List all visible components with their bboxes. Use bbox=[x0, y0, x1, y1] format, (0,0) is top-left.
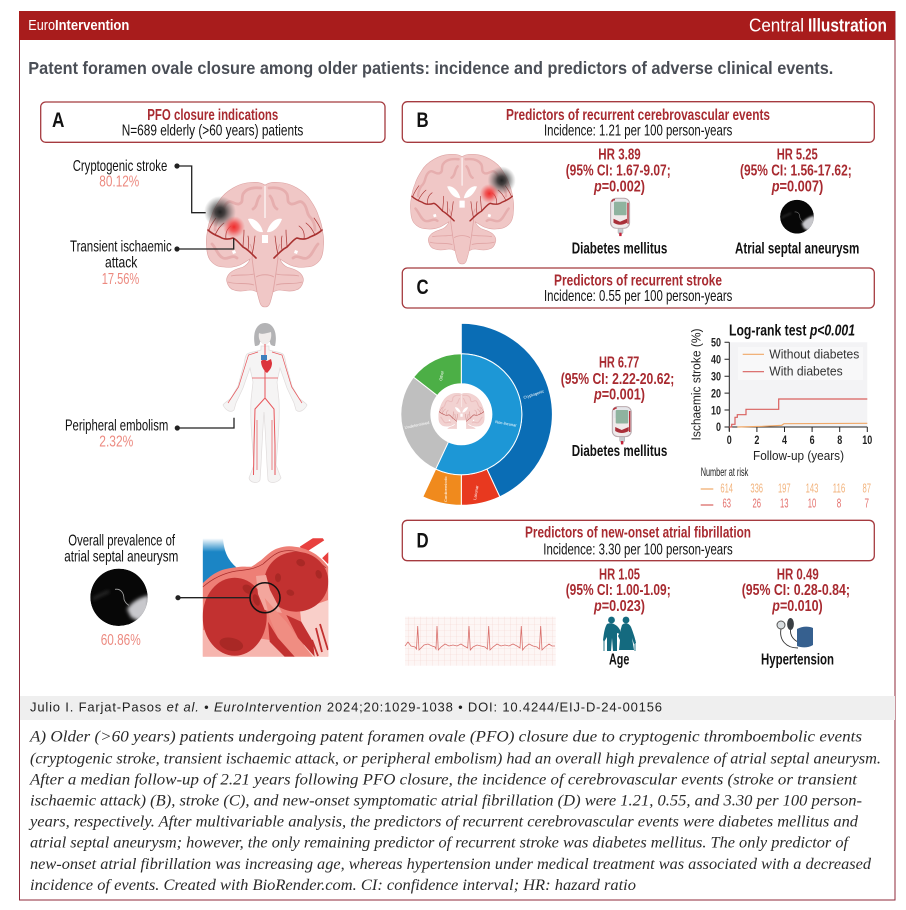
chart: Kaplan-Meier ischaemic stroke: Ischaemic stroke (%) bbox=[690, 328, 704, 440]
predictor: diabetes mellitus: HR 3.89 bbox=[598, 146, 641, 163]
predictor: atrial septal aneurysm: (95% CI: 1.56-17.62; bbox=[740, 163, 852, 180]
predictor: hypertension: (95% CI: 0.28-0.84; bbox=[742, 582, 850, 599]
chart: stroke aetiology sunburst: Cardioembolic bbox=[443, 476, 448, 502]
number at risk table: 336 bbox=[750, 481, 763, 496]
predictor: age bbox=[566, 566, 671, 668]
number at risk table: Number at risk bbox=[701, 465, 749, 479]
chart: Kaplan-Meier ischaemic stroke: 10 bbox=[711, 404, 721, 418]
chart: Kaplan-Meier ischaemic stroke: 8 bbox=[837, 433, 842, 447]
label: cryptogenic stroke: Cryptogenic stroke bbox=[73, 158, 167, 175]
chart: Kaplan-Meier ischaemic stroke: 20 bbox=[711, 386, 721, 400]
connector: septum callout bbox=[175, 583, 280, 613]
panel D heading: D bbox=[417, 530, 429, 553]
connector: transient ischaemic attack bbox=[174, 238, 234, 252]
citation band: Julio I. Farjat-Pasos et al. • EuroIntervention 2024;20:1029-1038 • DOI: 10.4244/EIJ-D-24-00156 bbox=[30, 700, 662, 715]
connector: peripheral embolism bbox=[175, 418, 234, 431]
predictor: diabetes mellitus: HR 6.77 bbox=[599, 354, 639, 371]
panel B heading: Incidence: 1.21 per 100 person-years bbox=[544, 123, 732, 140]
label: transient ischaemic attack bbox=[70, 239, 172, 288]
icon: echocardiography image bbox=[90, 569, 149, 626]
chart: Kaplan-Meier ischaemic stroke: 30 bbox=[711, 370, 721, 384]
caption text bbox=[28, 729, 881, 894]
chart: stroke aetiology sunburst: Other bbox=[438, 370, 445, 381]
chart: Kaplan-Meier ischaemic stroke: 50 bbox=[711, 336, 721, 350]
number at risk table: 116 bbox=[833, 481, 845, 496]
predictor: diabetes mellitus: p=0.002) bbox=[593, 179, 645, 196]
chart: stroke aetiology sunburst: Undetermined bbox=[404, 420, 430, 430]
icon: blood pressure cuff bbox=[777, 618, 813, 648]
panel C heading bbox=[402, 268, 874, 308]
predictor: age: HR 1.05 bbox=[599, 566, 640, 583]
label: transient ischaemic attack: 17.56% bbox=[102, 271, 139, 288]
number at risk table: 143 bbox=[806, 481, 818, 496]
panel D heading bbox=[402, 520, 874, 561]
panel B heading: B bbox=[417, 109, 429, 133]
number at risk table: 26 bbox=[752, 496, 761, 511]
caption text: After a median follow-up of 2.21 years following PFO closure, the incidence of cerebrovascular events (stroke or transient bbox=[29, 771, 858, 788]
caption text: years, respectively. After multivariable analysis, the predictors of recurrent cerebrovascular events were diabetes mellitus and bbox=[28, 814, 858, 831]
chart: Kaplan-Meier ischaemic stroke: Follow-up (years) bbox=[753, 449, 844, 463]
header bar: Central bbox=[749, 16, 804, 36]
panel C heading: Incidence: 0.55 per 100 person-years bbox=[544, 288, 732, 305]
header bar bbox=[19, 11, 895, 40]
panel A heading: PFO closure indications bbox=[147, 107, 278, 124]
chart: Kaplan-Meier ischaemic stroke: 2 bbox=[754, 433, 760, 447]
panel A heading bbox=[41, 102, 385, 142]
number at risk table bbox=[701, 465, 871, 511]
label: transient ischaemic attack: Transient ischaemic bbox=[70, 239, 172, 256]
icon: human body with arteries bbox=[223, 323, 307, 482]
chart legend bbox=[743, 347, 859, 379]
label: peripheral embolism: Peripheral embolism bbox=[65, 418, 168, 435]
label: cryptogenic stroke: 80.12% bbox=[99, 174, 139, 191]
connector: cryptogenic stroke bbox=[174, 163, 206, 213]
number at risk table: 87 bbox=[862, 481, 871, 496]
predictor: diabetes mellitus bbox=[561, 354, 674, 460]
chart: Kaplan-Meier ischaemic stroke: 6 bbox=[810, 433, 815, 447]
icon: ECG trace bbox=[405, 617, 556, 666]
header bar: Illustration bbox=[808, 16, 887, 36]
predictor: diabetes mellitus: p=0.001) bbox=[593, 386, 645, 403]
panel B heading: Predictors of recurrent cerebrovascular events bbox=[506, 107, 770, 124]
predictor: age: p=0.023) bbox=[593, 598, 645, 615]
citation band bbox=[20, 696, 895, 720]
chart: stroke aetiology sunburst: Non-lacunar bbox=[495, 419, 518, 428]
caption text: new-onset atrial fibrillation was increasing age, whereas hypertension under medical treatment was associated with a decreased bbox=[30, 856, 871, 873]
predictor: hypertension: Hypertension bbox=[761, 651, 834, 668]
number at risk table: 197 bbox=[778, 481, 791, 496]
icon: brain with lesions bbox=[410, 154, 516, 264]
number at risk table: 13 bbox=[780, 496, 789, 511]
number at risk table: 10 bbox=[808, 496, 816, 511]
caption text: incidence of events. Created with BioRender.com. CI: confidence interval; HR: hazard ratio bbox=[30, 877, 636, 894]
icon: miniature brain bbox=[438, 393, 484, 429]
predictor: hypertension: p=0.010) bbox=[772, 598, 823, 615]
panel C: recurrent stroke bbox=[401, 268, 874, 511]
label: peripheral embolism bbox=[65, 418, 168, 451]
caption text: (cryptogenic stroke, transient ischaemic attack, or peripheral embolism) had an overall high prevalence of atrial septal aneurysm. bbox=[30, 750, 881, 767]
chart: stroke aetiology sunburst: Lacunar bbox=[472, 484, 480, 500]
chart legend: With diabetes bbox=[769, 365, 843, 379]
predictor: diabetes mellitus: (95% CI: 1.67-9.07; bbox=[566, 163, 671, 180]
panel A: PFO closure indications bbox=[41, 102, 385, 657]
header bar: Intervention bbox=[55, 17, 129, 34]
label: cryptogenic stroke bbox=[73, 158, 167, 191]
predictor: atrial septal aneurysm: p=0.007) bbox=[771, 179, 823, 196]
predictor: hypertension bbox=[742, 566, 850, 668]
chart legend: Without diabetes bbox=[769, 347, 859, 361]
number at risk table: 7 bbox=[864, 496, 869, 511]
panel D: new-onset atrial fibrillation bbox=[402, 520, 874, 668]
predictor: hypertension: HR 0.49 bbox=[777, 566, 819, 583]
caption text: ischaemic attack) (B), stroke (C), and new-onset symptomatic atrial fibrillation (D) were 1.21, 0.55, and 3.30 per 100 person- bbox=[30, 792, 862, 809]
caption text: A) Older (>60 years) patients undergoing patent foramen ovale (PFO) closure due to cryptogenic thromboembolic events bbox=[29, 729, 862, 746]
panel C heading: Predictors of recurrent stroke bbox=[554, 272, 722, 290]
number at risk table: 63 bbox=[722, 496, 731, 511]
illustration: heart septum bbox=[203, 537, 332, 657]
header bar: Euro bbox=[28, 17, 55, 34]
label: atrial septal aneurysm prevalence: 60.86% bbox=[101, 632, 141, 649]
label: peripheral embolism: 2.32% bbox=[99, 434, 133, 451]
panel D heading: Predictors of new-onset atrial fibrillation bbox=[525, 525, 751, 542]
predictor: diabetes mellitus: (95% CI: 2.22-20.62; bbox=[561, 371, 674, 388]
chart: Kaplan-Meier ischaemic stroke: 0 bbox=[727, 433, 732, 447]
predictor: age: (95% CI: 1.00-1.09; bbox=[566, 582, 671, 599]
chart: Kaplan-Meier ischaemic stroke bbox=[690, 323, 873, 511]
panel C heading: C bbox=[417, 276, 429, 300]
number at risk table: 8 bbox=[837, 496, 841, 511]
title: Patent foramen ovale closure among older patients: incidence and predictors of adverse clinical events. bbox=[28, 58, 833, 78]
predictor: atrial septal aneurysm: Atrial septal aneurysm bbox=[735, 240, 859, 257]
chart: stroke aetiology sunburst bbox=[401, 323, 552, 505]
label: atrial septal aneurysm prevalence: atrial septal aneurysm bbox=[64, 549, 178, 566]
label: atrial septal aneurysm prevalence bbox=[64, 533, 178, 649]
icon: elderly couple bbox=[603, 617, 636, 651]
label: transient ischaemic attack: attack bbox=[105, 255, 138, 272]
label: atrial septal aneurysm prevalence: Overall prevalence of bbox=[68, 533, 175, 550]
icon: brain with lesions bbox=[204, 182, 324, 307]
panel A heading: A bbox=[52, 110, 65, 132]
predictor: diabetes mellitus: Diabetes mellitus bbox=[572, 240, 667, 257]
panel A heading: N=689 elderly (>60 years) patients bbox=[122, 123, 303, 140]
predictor: diabetes mellitus: Diabetes mellitus bbox=[572, 443, 667, 460]
chart title: Log-rank test p<0.001 bbox=[729, 323, 855, 340]
chart: stroke aetiology sunburst: Cryptogenic bbox=[523, 389, 545, 400]
predictor: age: Age bbox=[609, 651, 629, 668]
chart: Kaplan-Meier ischaemic stroke: 4 bbox=[782, 433, 787, 447]
panel B: recurrent cerebrovascular events bbox=[402, 102, 874, 264]
panel D heading: Incidence: 3.30 per 100 person-years bbox=[543, 541, 733, 558]
chart: Kaplan-Meier ischaemic stroke: 10 bbox=[862, 433, 873, 447]
predictor: atrial septal aneurysm bbox=[735, 146, 859, 257]
chart: Kaplan-Meier ischaemic stroke: 0 bbox=[716, 420, 721, 434]
chart: Kaplan-Meier ischaemic stroke: 40 bbox=[711, 352, 721, 366]
predictor: atrial septal aneurysm: HR 5.25 bbox=[777, 146, 818, 163]
panel B heading bbox=[402, 102, 874, 142]
number at risk table: 614 bbox=[720, 481, 733, 496]
predictor: diabetes mellitus bbox=[566, 146, 671, 257]
caption text: atrial septal aneurysm; however, the only remaining predictor of recurrent stroke was diabetes mellitus. The only predictor of bbox=[30, 835, 851, 852]
